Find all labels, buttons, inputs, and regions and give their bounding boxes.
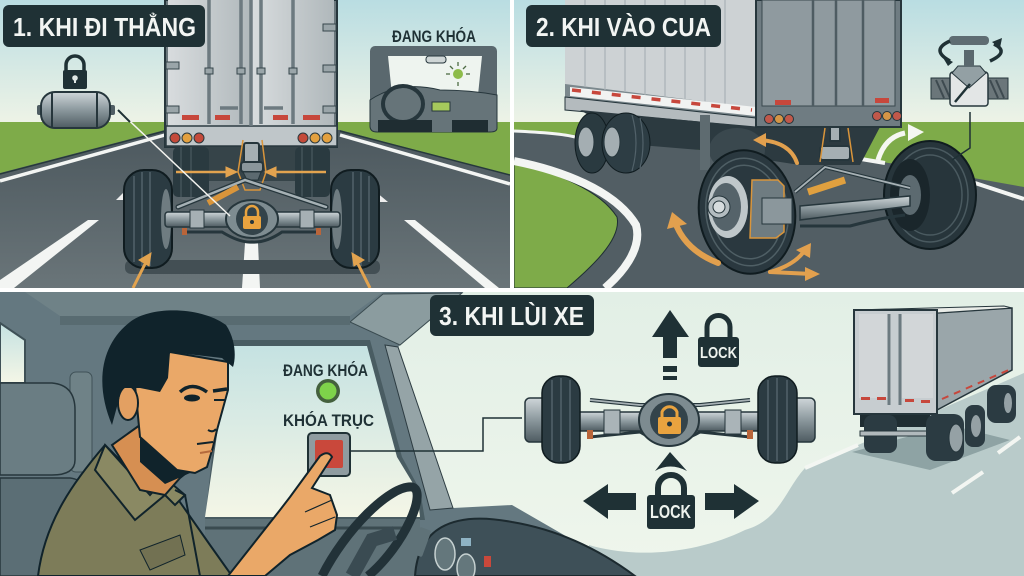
- front steering wheel: [698, 149, 796, 275]
- ear: [118, 386, 138, 420]
- icon: air tank: [37, 92, 115, 128]
- hand and forearm: [228, 453, 337, 576]
- red button: [308, 433, 350, 476]
- lock label: LOCK: [650, 502, 691, 522]
- trailer in background: [852, 306, 1016, 470]
- reverse axle: [525, 376, 815, 463]
- windscreen background: [398, 292, 1024, 552]
- icon: padlock: [63, 56, 87, 89]
- title: 2 cornering: 2. KHI VÀO CUA: [536, 12, 711, 42]
- curved road: [514, 130, 1024, 288]
- title: 3 reversing: [430, 295, 594, 336]
- trailer rear doors: [756, 0, 902, 127]
- axle and steering links: [795, 127, 910, 226]
- right wheel: [884, 141, 976, 249]
- arrow: left: [583, 484, 636, 519]
- driver seat: [0, 372, 92, 576]
- leader line from tank to axle: [118, 110, 230, 216]
- title: 2 cornering: [526, 5, 721, 47]
- collar: [95, 445, 185, 520]
- eye and brow: [180, 386, 227, 392]
- panel: 3 reversing: [0, 292, 1024, 576]
- indicator light: [316, 379, 340, 403]
- sky and grass background: [0, 0, 510, 182]
- icon: bottom lock: [647, 475, 695, 529]
- cab interior: [0, 292, 566, 576]
- orange force arrows: [133, 167, 370, 288]
- neck: [112, 425, 190, 495]
- title: 3 reversing: 3. KHI LÙI XE: [439, 301, 584, 331]
- left wheel: [124, 170, 172, 268]
- label: locked status: ĐANG KHÓA: [283, 361, 368, 380]
- rear dual wheels and undercarriage: [173, 147, 330, 197]
- label: locked: ĐANG KHÓA: [392, 27, 476, 46]
- arrow: right: [705, 484, 759, 519]
- label: axle lock: KHÓA TRỤC: [283, 411, 374, 430]
- title: 1 going straight: 1. KHI ĐI THẲNG: [13, 12, 196, 42]
- orange arrowheads: [667, 133, 820, 281]
- chevron up: [655, 452, 687, 471]
- icon: control valve: [931, 36, 1008, 106]
- driver: [38, 310, 235, 576]
- steering wheel: [322, 487, 417, 576]
- lock label: LOCK: [700, 345, 737, 362]
- dashboard: [411, 519, 635, 576]
- under-trailer frame: [580, 110, 880, 172]
- wire from button to axle: [350, 418, 522, 451]
- tandem wheels: [575, 113, 650, 173]
- leader line to valve: [952, 112, 970, 160]
- hair: [102, 310, 235, 425]
- button panel: [283, 361, 374, 476]
- road in background: [589, 373, 1024, 576]
- right wheel: [331, 170, 379, 268]
- axle with links and lock: [165, 140, 340, 242]
- panel: 2 cornering: [514, 0, 1024, 288]
- sky and grass background: [514, 0, 1024, 192]
- orange motion arrows: [675, 140, 812, 274]
- trailer rear: [165, 0, 337, 147]
- white turn arrow: [878, 124, 924, 160]
- road: [0, 130, 510, 288]
- trailer side: [565, 0, 756, 127]
- arrow: forward: [652, 310, 689, 380]
- shirt: [38, 445, 232, 576]
- title: 1 going straight: [3, 5, 205, 47]
- face: [135, 352, 228, 473]
- inset: cab dashboard: [370, 46, 497, 132]
- icon: top lock: [698, 316, 739, 367]
- road markings: [805, 437, 1020, 493]
- jaw shadow: [140, 437, 190, 484]
- panel: 1 going straight: [0, 0, 510, 288]
